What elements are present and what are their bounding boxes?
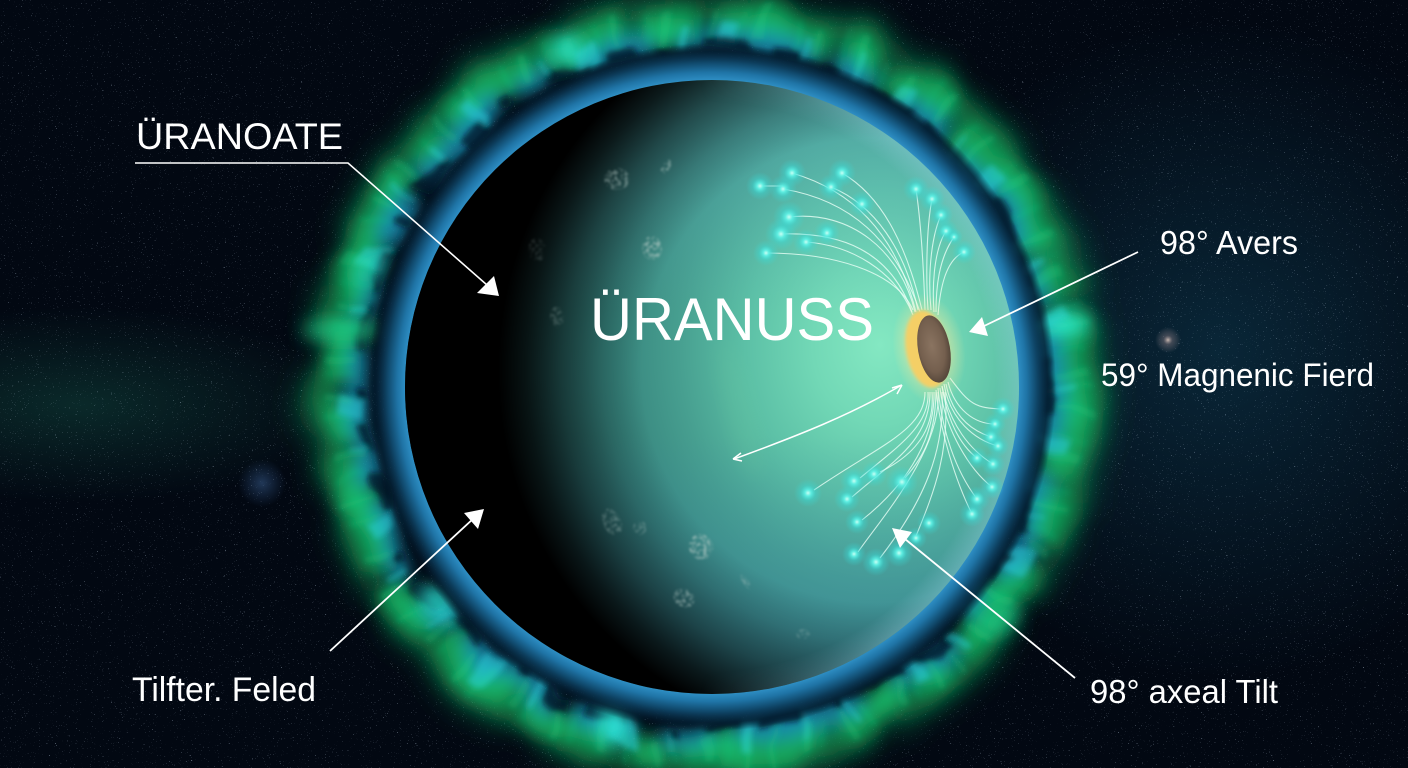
planet name: ÜRANUSS	[590, 286, 874, 353]
label: upper right callout	[969, 224, 1298, 336]
planet atmosphere rim	[368, 43, 1056, 731]
label: bottom left callout: Tilfter. Feled	[132, 671, 316, 709]
label: top left callout: ÜRANOATE	[136, 116, 343, 157]
label: lower right callout	[892, 528, 1278, 710]
planet disk	[405, 80, 1019, 694]
label: top left callout	[135, 116, 499, 296]
aurora ring	[302, 3, 1088, 768]
thin double arrow	[733, 385, 902, 461]
magnetic field lines, south	[814, 378, 1003, 558]
arrow: bottom left callout	[330, 509, 484, 651]
arrow: lower right callout	[892, 528, 1075, 678]
label: upper right callout: 98° Avers	[1160, 224, 1298, 261]
magnetic pole moon	[884, 288, 974, 410]
surface craters	[528, 158, 810, 639]
magnetic field lines, north	[760, 173, 964, 315]
label: bottom left callout	[132, 509, 484, 709]
label: lower right callout: 98° axeal Tilt	[1090, 673, 1278, 710]
field line glow points	[746, 159, 1015, 576]
arrow: upper right callout	[969, 252, 1138, 336]
arrow: top left callout	[135, 163, 499, 296]
aurora highlights	[302, 36, 1088, 746]
label: magnetic field: 59° Magnenic Fierd	[1101, 357, 1374, 393]
